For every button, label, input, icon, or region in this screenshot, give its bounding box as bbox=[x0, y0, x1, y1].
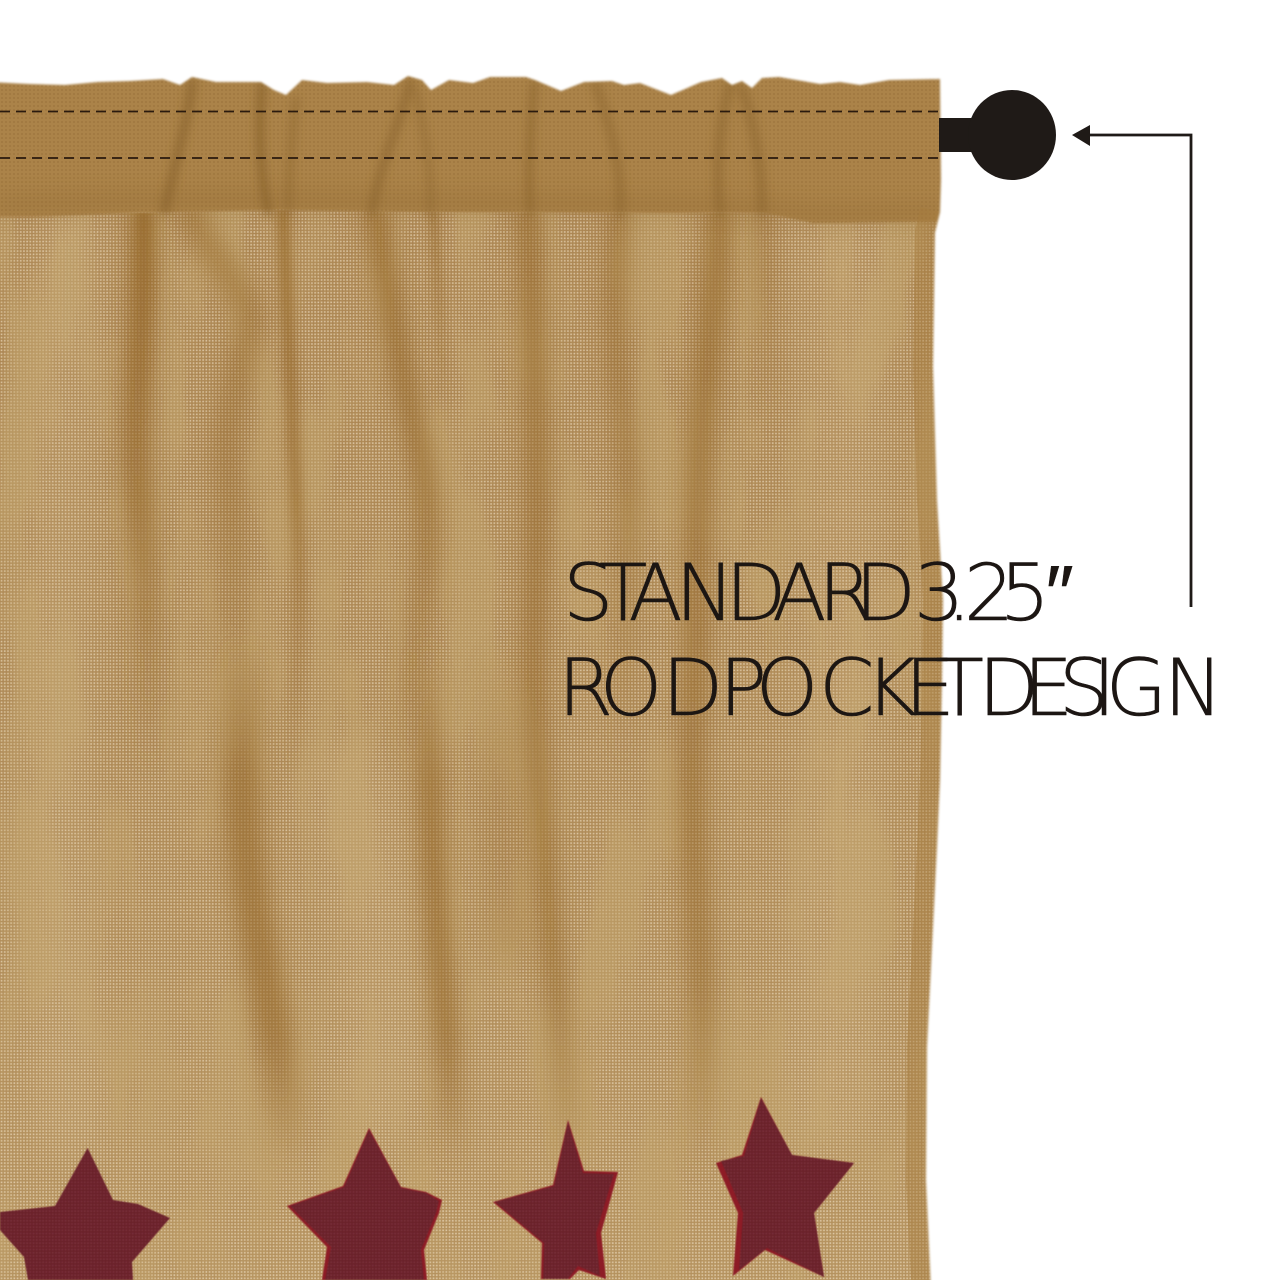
curtain panel bbox=[0, 70, 960, 1280]
star 2 bbox=[287, 1128, 442, 1280]
side hem bbox=[926, 212, 943, 1280]
callout text: STANDARD 3.25″ bbox=[563, 548, 1074, 639]
fabric highlights bbox=[58, 230, 844, 1120]
rod pocket band bbox=[0, 70, 960, 223]
star 4 bbox=[716, 1097, 854, 1277]
callout text: ROD POCKET DESIGN bbox=[558, 643, 1223, 734]
arrow: callout leader pointing to rod bbox=[1072, 125, 1191, 607]
fabric folds bbox=[136, 205, 770, 1180]
stitch lines: rod pocket bbox=[0, 112, 940, 158]
callout text bbox=[558, 548, 1223, 734]
star 1 bbox=[0, 1148, 170, 1280]
stars bbox=[0, 1097, 854, 1280]
icon: curtain rod with round finial bbox=[939, 90, 1056, 180]
star 3 bbox=[493, 1120, 618, 1279]
